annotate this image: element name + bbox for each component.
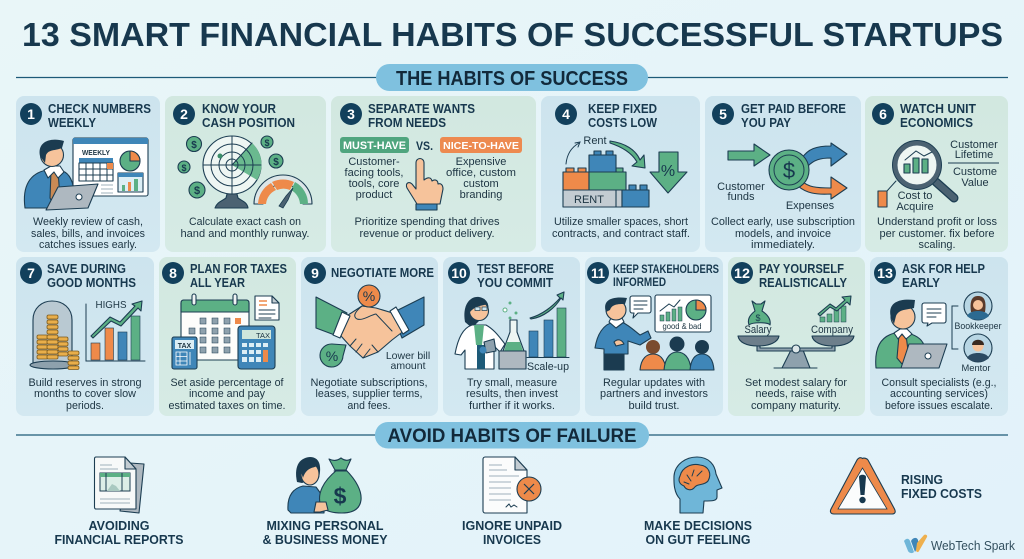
lifetime value fraction: Custome (953, 166, 997, 178)
failure item: rising fixed costs: RISING (901, 472, 943, 487)
badge 4: 4 (562, 106, 570, 122)
panel 10: test before you commit (443, 257, 580, 416)
text 13 (882, 377, 996, 412)
text 6: per customer. fix before (880, 228, 994, 240)
heading 10 (477, 261, 554, 290)
icon: lab flask (499, 302, 526, 369)
heading 12: REALISTICALLY (759, 275, 847, 290)
icon: rising bar chart (86, 299, 145, 361)
cost to acquire: Cost to (898, 190, 932, 202)
text 10: results, then invest (466, 388, 558, 400)
text 5: immediately. (751, 239, 815, 251)
failure item: mixing personal and business money: MIXING PERSONAL (266, 518, 384, 533)
heading 7 (47, 261, 136, 290)
heading 5 (741, 101, 846, 130)
text 3: revenue or product delivery. (360, 228, 494, 240)
panel 6: watch unit economics (865, 96, 1008, 252)
badge 13: 13 (877, 265, 893, 281)
text 12: company maturity. (751, 400, 841, 412)
heading 5: YOU PAY (741, 115, 791, 130)
section heading: the habits of success: THE HABITS OF SUCCESS (396, 68, 628, 90)
icon: presenter (595, 298, 651, 370)
flow labels: Expenses (786, 200, 835, 212)
icon: building blocks (563, 151, 649, 207)
icon: mentor: Mentor (962, 363, 990, 374)
badge 10 (448, 262, 470, 284)
tag: nice-to-have (440, 137, 522, 153)
icon: warning triangle (830, 458, 895, 514)
text 1: sales, bills, and invoices (31, 228, 145, 240)
heading 7: GOOD MONTHS (47, 275, 136, 290)
panel 9: negotiate more (301, 257, 438, 416)
icon: coins under glass dome (30, 301, 79, 370)
text 2: Calculate exact cash on (189, 216, 301, 228)
text 7: Build reserves in strong (28, 377, 142, 389)
badge 3 (340, 103, 362, 125)
failure item: make decisions on gut feeling (644, 457, 752, 547)
badge 5: 5 (719, 106, 727, 122)
icon: small tax calculator: TAX (178, 343, 192, 350)
heading 13 (902, 261, 985, 290)
icon: invoice with x mark (483, 457, 541, 513)
heading 12 (759, 261, 847, 290)
text 3: Prioritize spending that drives (354, 216, 500, 228)
text 8: income and pay (189, 388, 265, 400)
connector bracket (952, 306, 958, 349)
text 10: further if it works. (469, 400, 555, 412)
icon: dollar coins: $ (264, 138, 270, 148)
nice-to-have list: office, custom (446, 167, 516, 179)
badge 11: 11 (591, 265, 605, 281)
badge 12: 12 (734, 265, 750, 281)
panel 11: keep stakeholders informed (585, 257, 723, 416)
panel 7: save during good months (16, 257, 154, 416)
text 9: leases, supplier terms, (316, 388, 422, 400)
heading 6 (900, 101, 976, 130)
icon: building blocks: RENT (574, 194, 604, 206)
icon: percent bubble: % (326, 348, 338, 364)
text 1: catches issues early. (39, 239, 137, 251)
badge 5 (712, 103, 734, 125)
text 4 (552, 216, 690, 240)
icon: percent down arrow (650, 152, 687, 193)
tag: must-have: MUST-HAVE (343, 140, 406, 152)
heading 4 (588, 101, 657, 130)
failure item: mixing personal and business money (262, 457, 388, 547)
badge 7: 7 (27, 265, 35, 281)
text 4: Utilize smaller spaces, short (554, 216, 688, 228)
icon: percent badge top: % (363, 288, 375, 304)
text 2 (180, 216, 310, 240)
icon: dollar coins: $ (191, 140, 197, 151)
flow labels: funds (728, 191, 755, 203)
text 7 (28, 377, 142, 412)
failure item: make decisions on gut feeling: MAKE DECISIONS (644, 518, 752, 533)
icon: runway gauge (254, 175, 312, 208)
badge 9: 9 (311, 265, 319, 281)
icon: company growth chart: Company (811, 324, 853, 336)
heading 11 (613, 262, 719, 289)
vs label: VS. (416, 139, 433, 153)
tag: nice-to-have: NICE-TO-HAVE (443, 140, 519, 152)
panel 12: pay yourself realistically (728, 257, 865, 416)
heading 13: ASK FOR HELP (902, 261, 985, 276)
failure item: make decisions on gut feeling: ON GUT FEELING (646, 532, 750, 547)
icon: salary money bag (744, 301, 772, 336)
text 3 (354, 216, 500, 240)
nice-to-have list: branding (460, 189, 502, 201)
text 6 (877, 216, 997, 251)
badge 9 (304, 262, 326, 284)
must-have list: product (356, 189, 392, 201)
text 9: Negotiate subscriptions, (310, 377, 428, 389)
panel 5: get paid before you pay (705, 96, 861, 252)
heading 2: CASH POSITION (202, 115, 295, 130)
heading 9: NEGOTIATE MORE (331, 265, 434, 280)
text 7: periods. (66, 400, 104, 412)
text 11: partners and investors (600, 388, 708, 400)
badge 1 (20, 103, 42, 125)
text 5: Collect early, use subscription (711, 216, 855, 228)
heading 10: TEST BEFORE (477, 261, 554, 276)
heading 4: COSTS LOW (588, 115, 657, 130)
icon: salary money bag: Salary (744, 324, 772, 336)
heading 8: PLAN FOR TAXES (190, 261, 287, 276)
logo: webtech spark (904, 535, 1015, 553)
text 13: Consult specialists (e.g., (882, 377, 996, 389)
badge 12 (731, 262, 753, 284)
icon: rising bar chart: HIGHS (96, 299, 126, 311)
tag: must-have (340, 137, 409, 153)
rent label and arrows: Rent (583, 135, 607, 147)
icon: bookkeeper (954, 292, 1002, 332)
must-have list: tools, core (349, 178, 399, 190)
flow labels (717, 181, 835, 212)
failure item: ignore unpaid invoices (462, 457, 562, 547)
text 2: hand and monthly runway. (180, 228, 310, 240)
section heading: avoid habits of failure: AVOID HABITS OF FAILURE (388, 426, 636, 447)
text 12 (745, 377, 847, 412)
badge 6 (872, 103, 894, 125)
cost to acquire (878, 181, 934, 213)
report card good and bad (655, 295, 711, 332)
panel 13: ask for help early (870, 257, 1008, 416)
icon: percent badge top (358, 285, 380, 307)
badge 10: 10 (451, 265, 467, 281)
heading 11: INFORMED (613, 275, 666, 289)
failure item: ignore unpaid invoices: IGNORE UNPAID (462, 518, 562, 533)
cost to acquire: Acquire (896, 201, 934, 213)
panel 3: separate wants from needs (331, 96, 536, 252)
icon: man at laptop (24, 140, 98, 210)
failure item: rising fixed costs: FIXED COSTS (901, 486, 982, 501)
icon: cash flow arrows (728, 143, 847, 199)
badge 7 (20, 262, 42, 284)
text 13: before issues escalate. (885, 400, 993, 412)
badge 2: 2 (180, 106, 188, 122)
icon: dollar coins: $ (181, 163, 187, 173)
icon: dashboard window (73, 138, 148, 196)
text 10 (466, 377, 558, 412)
text 6: scaling. (918, 239, 956, 251)
lifetime value fraction (948, 139, 999, 189)
heading 3 (368, 101, 475, 130)
heading 10: YOU COMMIT (477, 275, 553, 290)
text 13: accounting services) (890, 388, 988, 400)
icon: dollar coin: $ (783, 158, 795, 183)
icon: dashboard window: WEEKLY (82, 150, 110, 157)
heading 12: PAY YOURSELF (759, 261, 844, 276)
icon: pointing hand (406, 158, 443, 210)
lower bill label: amount (390, 360, 426, 372)
icon: dollar coins: $ (273, 157, 279, 168)
report card good and bad: good & bad (662, 322, 702, 331)
title: 13 SMART FINANCIAL HABITS OF SUCCESSFUL STARTUPS (22, 16, 1003, 53)
text 7: months to cover slow (34, 388, 136, 400)
heading 13: EARLY (902, 275, 940, 290)
icon: handshake (316, 297, 424, 358)
icon: small tax calculator (172, 337, 197, 369)
panel 4: keep fixed costs low (541, 96, 700, 252)
text 1: Weekly review of cash, (33, 216, 143, 228)
failure item: mixing personal and business money: & BUSINESS MONEY (262, 532, 388, 547)
icon: dollar coin (769, 150, 809, 190)
heading 7: SAVE DURING (47, 261, 126, 276)
text 11: build trust. (628, 400, 680, 412)
icon: company growth chart (811, 296, 853, 336)
icon: magnifier with chart (892, 140, 954, 198)
text 4: contracts, and contract staff. (552, 228, 690, 240)
failure item: avoiding financial reports: AVOIDING (88, 518, 150, 533)
text 8: estimated taxes on time. (168, 400, 286, 412)
text 11 (600, 377, 708, 412)
text 5: models, and invoice (735, 228, 831, 240)
heading 8 (190, 261, 287, 290)
badge 8: 8 (169, 265, 177, 281)
logo: webtech spark: WebTech Spark (931, 538, 1015, 553)
text 10: Try small, measure (467, 377, 557, 389)
heading 6: WATCH UNIT (900, 101, 976, 116)
badge 2 (173, 103, 195, 125)
icon: radar (203, 136, 262, 208)
heading 2 (202, 101, 295, 130)
text 8: Set aside percentage of (170, 377, 284, 389)
panel 1: check numbers weekly (16, 96, 160, 252)
text 9 (310, 377, 428, 412)
icon: dollar coins: $ (194, 185, 200, 197)
flow labels: Customer (717, 181, 765, 193)
failure item: avoiding financial reports (54, 457, 184, 547)
panel 8: plan for taxes all year (159, 257, 296, 416)
icon: scale-up bars: Scale-up (527, 361, 569, 373)
lower bill label: Lower bill (386, 350, 430, 362)
panel 2: know your cash position (165, 96, 326, 252)
text 12: Set modest salary for (745, 377, 847, 389)
must-have list (344, 156, 404, 201)
badge 11 (587, 262, 609, 284)
badge 4 (555, 103, 577, 125)
icon: large tax calculator (238, 326, 275, 369)
rent label and arrows (566, 135, 645, 168)
nice-to-have list: custom (463, 178, 499, 190)
icon: woman with money bag: $ (334, 483, 347, 509)
icon: scientist (455, 297, 505, 369)
icon: dollar coins (178, 136, 283, 198)
icon: calendar (181, 294, 249, 360)
text 6: Understand profit or loss (877, 216, 997, 228)
badge 1: 1 (27, 106, 35, 122)
icon: tax document (255, 296, 279, 320)
heading 6: ECONOMICS (900, 115, 973, 130)
icon: head with brain (674, 457, 722, 513)
icon: percent down arrow: % (661, 163, 675, 180)
icon: large tax calculator: TAX (256, 331, 270, 340)
speech bubble (922, 303, 946, 326)
heading 1: CHECK NUMBERS (48, 101, 151, 116)
lower bill label (386, 350, 430, 372)
speech bubble (630, 296, 651, 318)
heading 11: KEEP STAKEHOLDERS (613, 262, 719, 276)
badge 6: 6 (879, 106, 887, 122)
lifetime value fraction: Lifetime (955, 149, 993, 161)
badge 3: 3 (347, 106, 355, 122)
icon: mentor (962, 334, 992, 374)
text 5 (711, 216, 855, 251)
heading 5: GET PAID BEFORE (741, 101, 846, 116)
must-have list: Customer- (348, 156, 400, 168)
nice-to-have list: Expensive (456, 156, 506, 168)
text 12: needs, raise with (756, 388, 836, 400)
failure item: ignore unpaid invoices: INVOICES (483, 532, 541, 547)
text 8 (168, 377, 286, 412)
icon: man at laptop (876, 300, 947, 368)
failure item: rising fixed costs (830, 458, 982, 514)
icon: report document (94, 457, 144, 513)
audience (640, 336, 714, 370)
icon: balance scale (738, 336, 854, 368)
text 1 (31, 216, 145, 251)
must-have list: facing tools, (344, 167, 404, 179)
heading 8: ALL YEAR (190, 275, 245, 290)
lifetime value fraction: Customer (950, 139, 998, 151)
icon: salary money bag: $ (755, 313, 761, 323)
text 9: and fees. (348, 400, 390, 412)
heading 3: SEPARATE WANTS (368, 101, 475, 116)
heading 2: KNOW YOUR (202, 101, 276, 116)
icon: percent bubble (320, 344, 346, 367)
lifetime value fraction: Value (961, 177, 989, 189)
heading 1 (48, 101, 151, 130)
text 11: Regular updates with (603, 377, 705, 389)
nice-to-have list (446, 156, 516, 201)
badge 8 (162, 262, 184, 284)
icon: scale-up bars (527, 292, 569, 373)
heading 1: WEEKLY (48, 115, 96, 130)
icon: bookkeeper: Bookkeeper (954, 321, 1002, 332)
badge 13 (874, 262, 896, 284)
failure item: avoiding financial reports: FINANCIAL REPORTS (54, 532, 184, 547)
heading 3: FROM NEEDS (368, 115, 446, 130)
heading 4: KEEP FIXED (588, 101, 657, 116)
